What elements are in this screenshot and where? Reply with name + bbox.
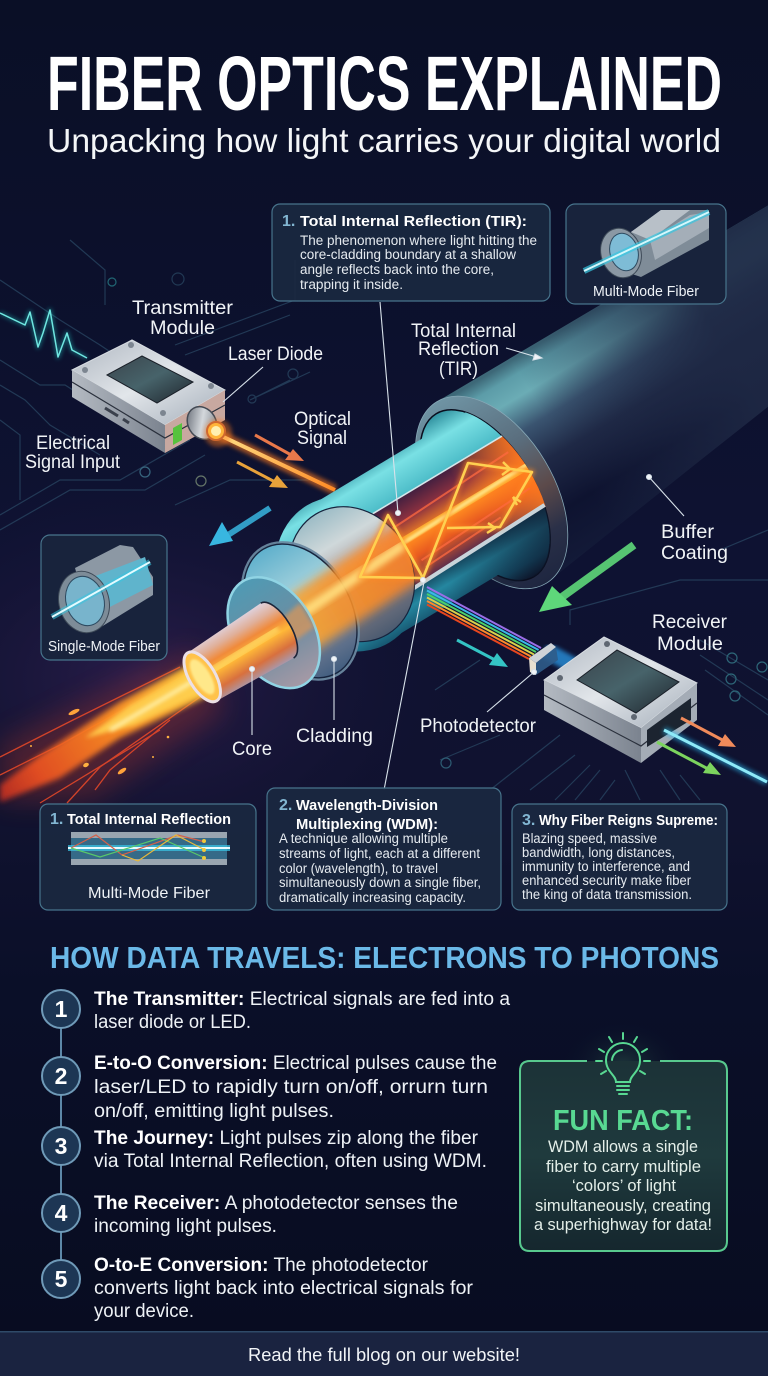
panel: fun fact: a superhighway for data! xyxy=(534,1215,712,1234)
step 5: 5 xyxy=(55,1266,68,1292)
step 2: on/off, emitting light pulses. xyxy=(94,1101,334,1122)
diagram labels: Photodetector xyxy=(420,716,537,737)
timeline connector xyxy=(60,1009,62,1279)
heartbeat electrical signal xyxy=(0,310,87,358)
panel: multi-mode fiber inset: Multi-Mode Fiber xyxy=(593,284,699,300)
panel: why fiber reigns supreme: enhanced security make fiber xyxy=(522,873,691,888)
panel: fun fact: simultaneously, creating xyxy=(535,1196,711,1215)
panel: total internal reflection definition: core-cladding boundary at a shallow xyxy=(300,247,516,262)
step 2: E-to-O Conversion: Electrical pulses cause the xyxy=(94,1053,497,1074)
leader lines and dots xyxy=(223,302,684,790)
step 4: incoming light pulses. xyxy=(94,1216,277,1237)
cladding mid section xyxy=(216,483,444,702)
panel: total internal reflection diagram: Multi-Mode Fiber xyxy=(88,885,211,902)
panel: total internal reflection definition: angle reflects back into the core, xyxy=(300,262,494,277)
step 4: 4 xyxy=(55,1200,68,1226)
step 1: laser diode or LED. xyxy=(94,1012,251,1033)
receiver module xyxy=(544,637,697,763)
core tube xyxy=(174,596,306,710)
total internal reflection zigzag rays xyxy=(360,462,532,578)
diagram labels: (TIR) xyxy=(439,359,478,380)
panel: wavelength-division multiplexing: dramatically increasing capacity. xyxy=(279,890,466,905)
panel: wavelength-division multiplexing: Multiplexing (WDM): xyxy=(296,816,438,833)
step 2: laser/LED to rapidly turn on/off, orrurn turn xyxy=(94,1077,488,1098)
light streak along fiber xyxy=(288,524,414,654)
step 1: 1 xyxy=(55,996,68,1022)
panel: why fiber reigns supreme xyxy=(512,804,727,910)
diagram labels: Module xyxy=(150,318,215,339)
panel: single-mode fiber inset: Single-Mode Fiber xyxy=(48,639,160,655)
diagram labels: Signal xyxy=(297,428,347,449)
panel: wavelength-division multiplexing: A technique allowing multiple xyxy=(279,831,448,846)
panel: wavelength-division multiplexing: streams of light, each at a different xyxy=(279,846,480,861)
diagram labels: Electrical xyxy=(36,433,110,454)
step 4 xyxy=(42,1193,458,1237)
diagram labels: Receiver xyxy=(652,612,728,633)
footer bar xyxy=(0,1331,768,1376)
panel: fun fact: FUN FACT: xyxy=(553,1105,693,1137)
receiver output arrows xyxy=(657,718,767,782)
diagram labels: Coating xyxy=(661,543,728,564)
panel: total internal reflection diagram: 1. xyxy=(50,811,63,828)
panel: wavelength-division multiplexing: color (wavelength), to travel xyxy=(279,861,438,876)
diagram labels: Core xyxy=(232,739,272,760)
background circuit traces xyxy=(0,240,768,800)
panel: wavelength-division multiplexing: simultaneously down a single fiber, xyxy=(279,875,481,890)
diagram labels: Transmitter xyxy=(132,298,234,319)
cut-away window xyxy=(372,435,546,590)
panel: single-mode fiber inset xyxy=(41,535,167,660)
diagram labels: Reflection xyxy=(418,339,499,360)
panel: why fiber reigns supreme: Blazing speed, massive xyxy=(522,831,657,846)
outer cladding teal collar xyxy=(247,399,576,694)
WDM rainbow beams xyxy=(427,587,541,659)
step 5: your device. xyxy=(94,1301,194,1322)
step 4: The Receiver: A photodetector senses the xyxy=(94,1193,458,1214)
panel: why fiber reigns supreme: bandwidth, long distances, xyxy=(522,845,675,860)
panel: fun fact: ‘colors’ of light xyxy=(572,1176,676,1195)
photodetector xyxy=(529,643,578,675)
panel: wavelength-division multiplexing: 2. xyxy=(279,797,292,814)
buffer coating outer jacket xyxy=(384,157,768,615)
panel: total internal reflection diagram: Total Internal Reflection xyxy=(67,811,231,828)
section heading: HOW DATA TRAVELS: ELECTRONS TO PHOTONS xyxy=(50,940,719,975)
panel: fun fact xyxy=(520,1020,727,1251)
diagram labels: Optical xyxy=(294,409,351,430)
diagram labels: Total Internal xyxy=(411,321,516,342)
panel: total internal reflection diagram xyxy=(40,804,256,910)
footer bar: Read the full blog on our website! xyxy=(248,1345,520,1365)
laser beam from transmitter xyxy=(213,432,335,490)
panel: why fiber reigns supreme: immunity to interference, and xyxy=(522,859,690,874)
diagram labels: Buffer xyxy=(661,522,715,543)
step 2 xyxy=(42,1053,497,1122)
diagram labels: Laser Diode xyxy=(228,344,323,365)
step 3: 3 xyxy=(55,1133,67,1159)
diagram labels xyxy=(25,298,728,760)
step 2: 2 xyxy=(55,1063,67,1089)
panel: total internal reflection definition: The phenomenon where light hitting the xyxy=(300,233,537,248)
diagram labels: Cladding xyxy=(296,726,373,747)
step 5: O-to-E Conversion: The photodetector xyxy=(94,1255,429,1276)
subtitle: Unpacking how light carries your digital world xyxy=(47,122,721,159)
panel: total internal reflection definition: Total Internal Reflection (TIR): xyxy=(300,213,527,230)
panel: wavelength-division multiplexing xyxy=(267,788,501,910)
step 1: The Transmitter: Electrical signals are fed into a xyxy=(94,989,510,1010)
diagram labels: Signal Input xyxy=(25,452,121,473)
panel: fun fact: fiber to carry multiple xyxy=(546,1157,701,1176)
panel: why fiber reigns supreme: Why Fiber Reigns Supreme: xyxy=(539,812,718,829)
panel: total internal reflection definition: 1. xyxy=(282,213,295,230)
step 3 xyxy=(42,1127,487,1172)
step 5 xyxy=(42,1255,474,1322)
step 3: The Journey: Light pulses zip along the fiber xyxy=(94,1128,479,1149)
diagram labels: Module xyxy=(657,634,723,655)
icon: light bulb xyxy=(596,1033,650,1094)
panel: multi-mode fiber inset xyxy=(566,204,726,304)
panel: why fiber reigns supreme: 3. xyxy=(522,812,535,829)
transmitter module xyxy=(72,340,232,453)
panel: total internal reflection definition xyxy=(272,204,550,301)
outgoing orange light fan xyxy=(0,650,225,803)
step 5: converts light back into electrical signals for xyxy=(94,1278,474,1299)
step 3: via Total Internal Reflection, often using WDM. xyxy=(94,1151,487,1172)
direction arrows xyxy=(209,435,634,667)
panel: why fiber reigns supreme: the king of data transmission. xyxy=(522,887,692,902)
fiber cable cross-section xyxy=(182,206,768,704)
panel: fun fact: WDM allows a single xyxy=(548,1137,698,1156)
step 1 xyxy=(42,989,510,1033)
panel: total internal reflection definition: trapping it inside. xyxy=(300,277,403,292)
cladding face disc xyxy=(209,561,339,705)
panel: wavelength-division multiplexing: Wavelength-Division xyxy=(296,797,438,814)
